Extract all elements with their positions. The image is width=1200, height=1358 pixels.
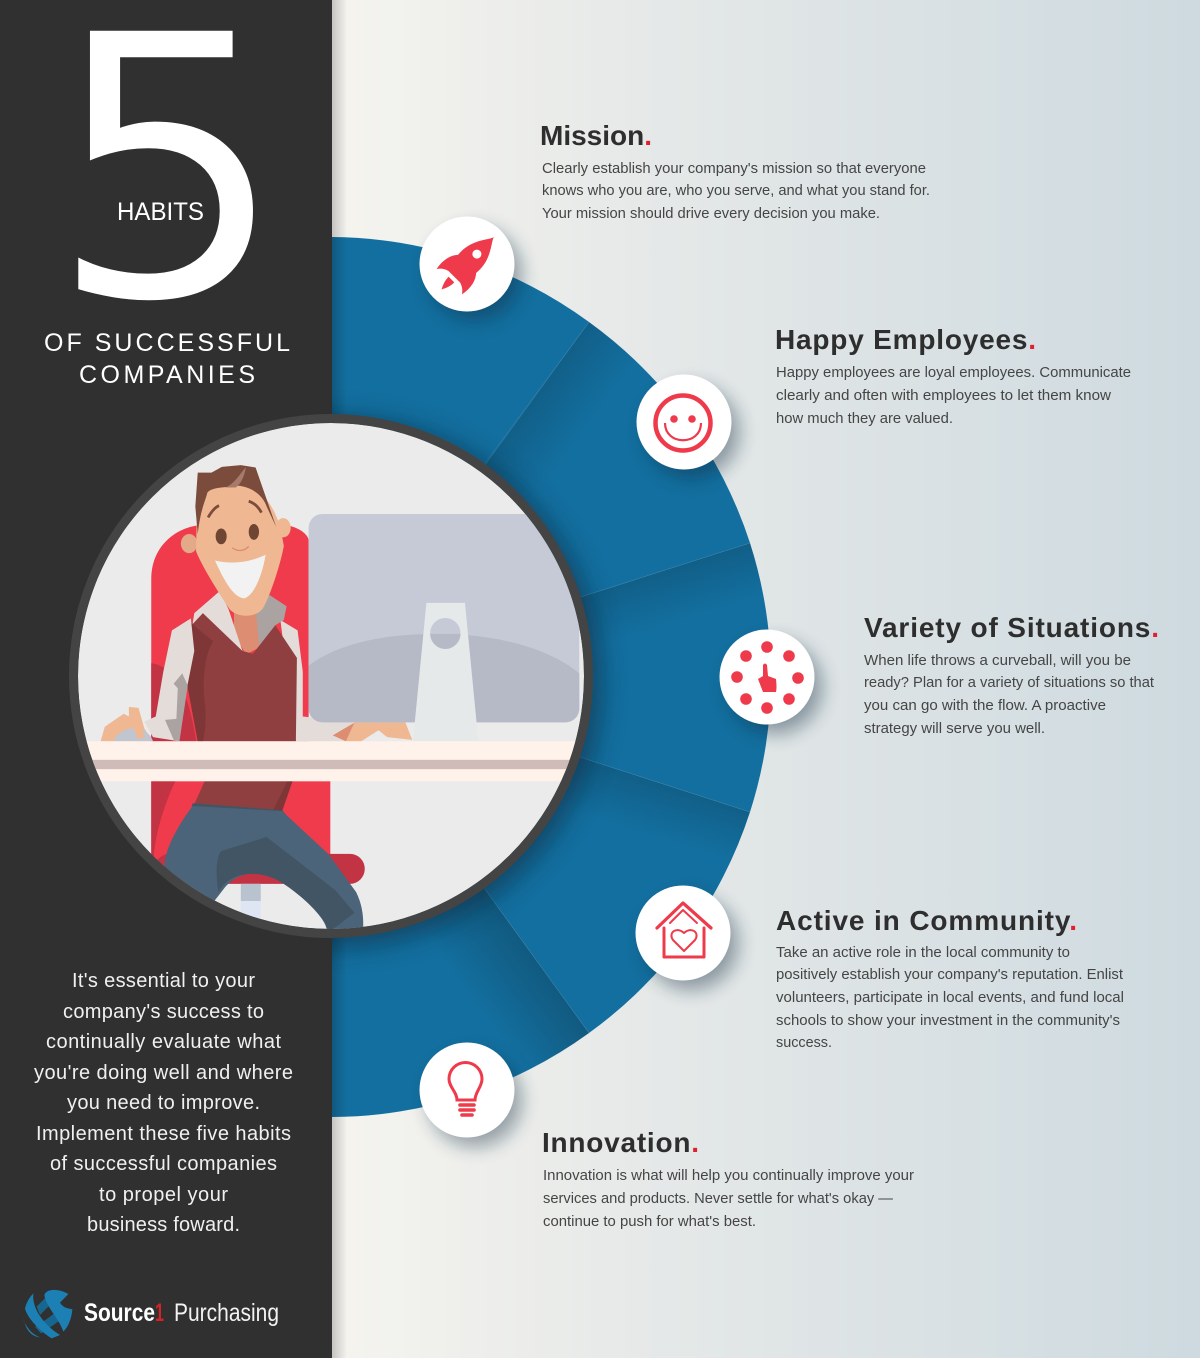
logo: Source1 Purchasing: Purchasing	[174, 1299, 279, 1327]
heading: Innovation.	[542, 1127, 699, 1158]
body text: success.	[776, 1035, 832, 1051]
body text	[776, 365, 1131, 427]
body text: Your mission should drive every decision you make.	[542, 206, 880, 222]
panel shadow	[332, 0, 347, 1358]
habit 3: variety of situations	[720, 612, 1159, 737]
body text: services and products. Never settle for what's okay —	[543, 1191, 893, 1207]
icon: house with heart	[636, 886, 738, 990]
body text: Innovation is what will help you continually improve your	[543, 1168, 914, 1184]
intro paragraph: continually evaluate what	[46, 1031, 281, 1053]
body text: how much they are valued.	[776, 411, 953, 427]
body text: Clearly establish your company's mission so that everyone	[542, 161, 926, 177]
intro paragraph: business foward.	[87, 1214, 240, 1236]
body text: volunteers, participate in local events, and fund local	[776, 990, 1124, 1006]
logo: Source1 Purchasing: Source	[84, 1299, 155, 1327]
of successful companies	[44, 329, 290, 389]
body text: strategy will serve you well.	[864, 721, 1045, 737]
body text: ready? Plan for a variety of situations so that	[864, 675, 1154, 691]
body text: When life throws a curveball, will you be	[864, 653, 1131, 669]
heading: Happy Employees.	[775, 324, 1036, 355]
illustration: man at desk in circle	[60, 418, 600, 934]
chair	[151, 525, 365, 929]
logo: Source1 Purchasing: 1	[155, 1299, 164, 1327]
habit 1: mission	[420, 120, 930, 321]
intro paragraph: Implement these five habits	[36, 1123, 291, 1145]
heading: Mission.	[540, 120, 652, 151]
body text: Happy employees are loyal employees. Communicate	[776, 365, 1131, 381]
body text: Take an active role in the local community to	[776, 945, 1070, 961]
intro paragraph: It's essential to your	[72, 970, 255, 992]
computer monitor	[309, 514, 579, 741]
body text: positively establish your company's reputation. Enlist	[776, 967, 1123, 983]
of successful companies: COMPANIES	[79, 361, 255, 389]
intro paragraph: you need to improve.	[67, 1092, 260, 1114]
body text: continue to push for what's best.	[543, 1214, 756, 1230]
body text: schools to show your investment in the community's	[776, 1013, 1120, 1029]
body text: clearly and often with employees to let them know	[776, 388, 1112, 404]
semicircular fan of five segments	[332, 237, 768, 1117]
of successful companies: OF SUCCESSFUL	[44, 329, 290, 357]
body text: knows who you are, who you serve, and what you stand for.	[542, 183, 930, 199]
heading: Active in Community.	[776, 905, 1077, 936]
body text	[864, 653, 1154, 737]
icon: light bulb	[420, 1042, 522, 1147]
right sleeve	[280, 620, 353, 741]
intro paragraph	[34, 970, 293, 1236]
body text	[776, 945, 1124, 1051]
habit 2: happy employees	[636, 324, 1131, 479]
habits label: HABITS	[117, 198, 204, 226]
globe icon	[23, 1290, 72, 1338]
background	[332, 0, 1200, 1358]
body text	[542, 161, 930, 222]
icon: hand with dots	[720, 630, 822, 734]
intro paragraph: company's success to	[63, 1001, 264, 1023]
icon: smiley face	[636, 374, 739, 479]
habit 5: innovation	[420, 1042, 914, 1230]
intro paragraph: you're doing well and where	[34, 1062, 293, 1084]
title	[44, 0, 290, 389]
desk	[60, 741, 600, 781]
intro paragraph: of successful companies	[50, 1153, 277, 1175]
intro paragraph: to propel your	[99, 1184, 228, 1206]
icon: rocket	[420, 216, 522, 321]
body text	[543, 1168, 914, 1230]
habit 4: active in community	[636, 886, 1124, 1051]
heading: Variety of Situations.	[864, 612, 1159, 643]
man	[101, 465, 363, 930]
dark left panel	[0, 0, 332, 1358]
right hand	[333, 722, 412, 741]
logo: Source1 Purchasing	[23, 1290, 279, 1338]
body text: you can go with the flow. A proactive	[864, 698, 1106, 714]
